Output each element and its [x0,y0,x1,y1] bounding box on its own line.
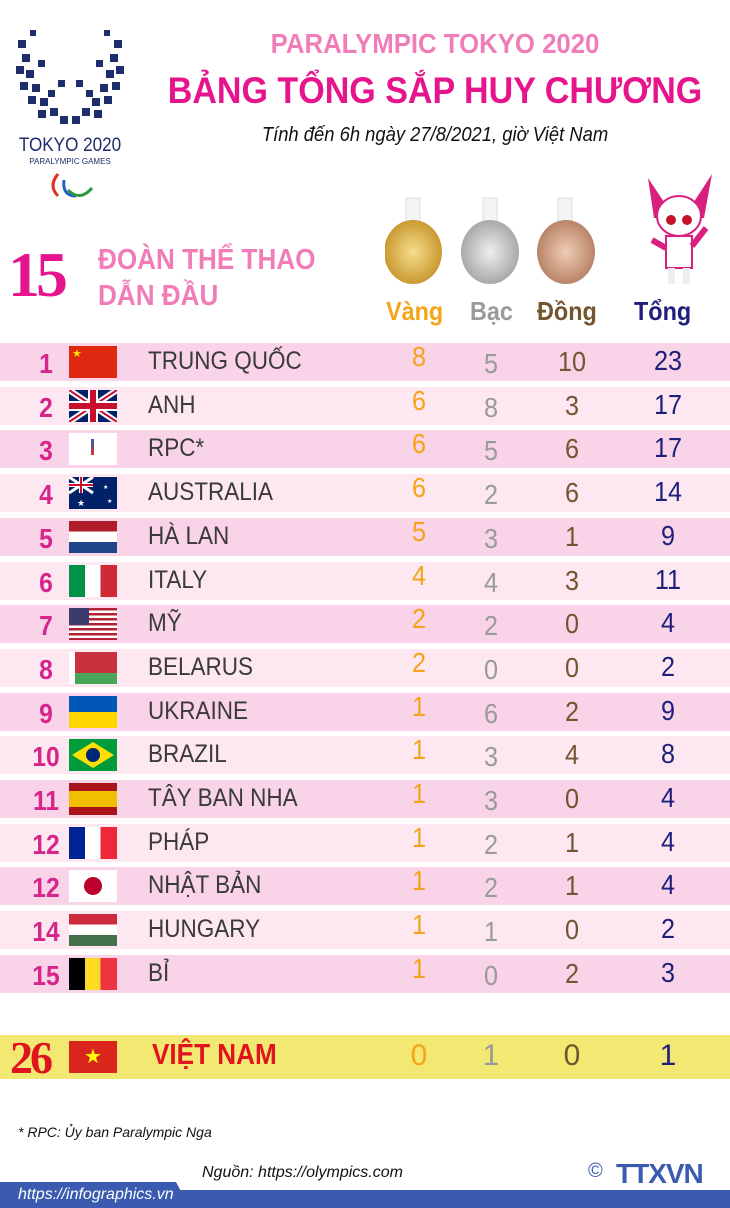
row 14: 1 [412,909,426,940]
row 10: 3 [484,741,498,772]
row 15: BỈ [148,959,169,987]
row 3: 5 [484,435,498,466]
logo: TTXVN: TTXVN [616,1158,703,1189]
row 15: 0 [484,960,498,991]
row 9: 1 [412,691,426,722]
row 14: 14 [32,916,60,947]
icon: medals [385,198,595,284]
row 7 [0,605,730,643]
row 8: 8 [39,654,53,685]
row 1: 1 [39,348,53,379]
row: Vietnam: 0 [564,1039,580,1072]
row 7: 4 [661,607,675,638]
row 4 [0,474,730,512]
source: Nguồn: https://olympics.com [202,1164,403,1181]
row 14: HUNGARY [148,915,260,943]
row: Vietnam: 1 [660,1039,676,1072]
title [168,28,702,146]
row 7: 0 [565,608,579,639]
row 12 [0,824,730,862]
title: Tính đến 6h ngày 27/8/2021, giờ Việt Nam [262,124,608,146]
row 11: 0 [565,783,579,814]
row 12: 1 [412,822,426,853]
row 5 [0,518,730,556]
footnote: * RPC: Ủy ban Paralympic Nga [18,1124,212,1140]
row 3: 17 [654,432,682,463]
row 2: 3 [565,390,579,421]
row 14: 2 [661,913,675,944]
row 6: ITALY [148,566,207,594]
row 15: 2 [565,958,579,989]
title: PARALYMPIC TOKYO 2020 [271,28,599,59]
row 15: 1 [412,953,426,984]
column headers: Tổng [634,296,691,326]
row 9: 9 [661,695,675,726]
row 14: 0 [565,914,579,945]
row 14 [0,911,730,949]
row: Vietnam: 1 [483,1039,499,1072]
row 4: ★ [77,498,85,508]
row 14: 1 [484,916,498,947]
column headers: Bạc [470,296,513,326]
row 5: 1 [565,521,579,552]
row 9 [0,693,730,731]
row 12: 12 [32,829,60,860]
row 6: 11 [655,564,681,594]
row 1: TRUNG QUỐC [148,347,302,375]
row 1: 10 [558,346,586,377]
logo: Tokyo 2020 Paralympic: PARALYMPIC GAMES [29,157,111,166]
row: Vietnam: VIỆT NAM [152,1039,277,1071]
logo: Tokyo 2020 Paralympic [16,30,124,198]
footer bar [0,1182,730,1208]
row 6 [0,562,730,600]
row 3: 6 [565,433,579,464]
row 11: 4 [661,782,675,813]
row 3 [0,430,730,468]
row 8: 2 [412,647,426,678]
row 8: 0 [565,652,579,683]
row: Vietnam: 26 [10,1032,50,1083]
row 6: 4 [412,560,426,590]
logo: Tokyo 2020 Paralympic: TOKYO 2020 [19,135,121,156]
row 1: 8 [412,341,426,372]
row 6: 3 [565,564,579,596]
row 6: 6 [39,566,53,598]
row 2: 2 [39,392,53,423]
row 5: 5 [412,516,426,547]
row 7: 7 [39,610,53,641]
row 7: 2 [484,610,498,641]
row 12: 4 [661,826,675,857]
table: medal rows [0,341,730,993]
row 11 [0,780,730,818]
row 4: ★ [103,484,108,491]
row 10: 8 [661,738,675,769]
row 8 [0,649,730,687]
row 5: 5 [39,523,53,554]
row 13: 2 [484,872,498,903]
row 4: 6 [565,477,579,508]
row 15: 3 [661,957,675,988]
row 13: NHẬT BẢN [148,871,261,899]
icon: mascot [648,174,712,284]
row 9: 2 [565,696,579,727]
row 11: 1 [412,778,426,809]
heading: 15 leading teams: 15 [8,239,64,310]
row 2: 17 [654,389,682,420]
row 13: 1 [565,870,579,901]
row 3: RPC* [148,434,204,462]
title: BẢNG TỔNG SẮP HUY CHƯƠNG [168,70,702,111]
row 2 [0,387,730,425]
heading: 15 leading teams: ĐOÀN THỂ THAO [98,244,316,276]
row: Vietnam [0,1035,730,1079]
row 4: 2 [484,479,498,510]
row 11: TÂY BAN NHA [148,784,298,812]
row 4: 4 [39,479,53,510]
row: Vietnam: 0 [411,1039,427,1072]
row 7: MỸ [148,609,182,637]
row 9: 6 [484,698,498,729]
row 12: PHÁP [148,828,209,856]
footer bar: https://infographics.vn [18,1186,174,1203]
row 5: 3 [484,523,498,554]
row 2: ANH [148,391,196,419]
row 2: 6 [412,385,426,416]
heading: 15 leading teams [8,239,316,312]
logo: TTXVN: © [588,1160,603,1182]
row 15 [0,955,730,993]
heading: 15 leading teams: DẪN ĐẦU [98,280,218,312]
row 9: UKRAINE [148,697,248,725]
row 10: BRAZIL [148,740,227,768]
row 5: HÀ LAN [148,522,229,550]
row 10: 4 [565,739,579,770]
row 10: 1 [412,734,426,765]
row 10: 10 [32,741,60,772]
row 11: 11 [33,785,59,816]
row 12: 1 [565,827,579,858]
row 8: 2 [661,651,675,682]
row 3: 6 [412,428,426,459]
row 13: 1 [412,865,426,896]
row 12: 2 [484,829,498,860]
row 7: 2 [412,603,426,634]
column headers [386,296,691,326]
row 8: BELARUS [148,653,253,681]
row 2: 8 [484,392,498,423]
row 10 [0,736,730,774]
row 15: 15 [32,960,60,991]
row 6: 4 [484,566,498,598]
row 3: 3 [39,435,53,466]
row 1 [0,343,730,381]
row 13: 12 [32,872,60,903]
row 13 [0,867,730,905]
row 11: 3 [484,785,498,816]
row: Vietnam: ★ [84,1046,102,1068]
column headers: Vàng [386,296,443,326]
row 1: ★ [72,348,82,360]
row 8: 0 [484,654,498,685]
row 1: 5 [484,348,498,379]
row 4: ★ [107,498,112,505]
row 1: 23 [654,345,682,376]
row 13: 4 [661,869,675,900]
column headers: Đồng [537,296,597,326]
row 9: 9 [39,698,53,729]
row 5: 9 [661,520,675,551]
row 4: 6 [412,472,426,503]
row 4: 14 [654,476,682,507]
row 4: AUSTRALIA [148,478,273,506]
